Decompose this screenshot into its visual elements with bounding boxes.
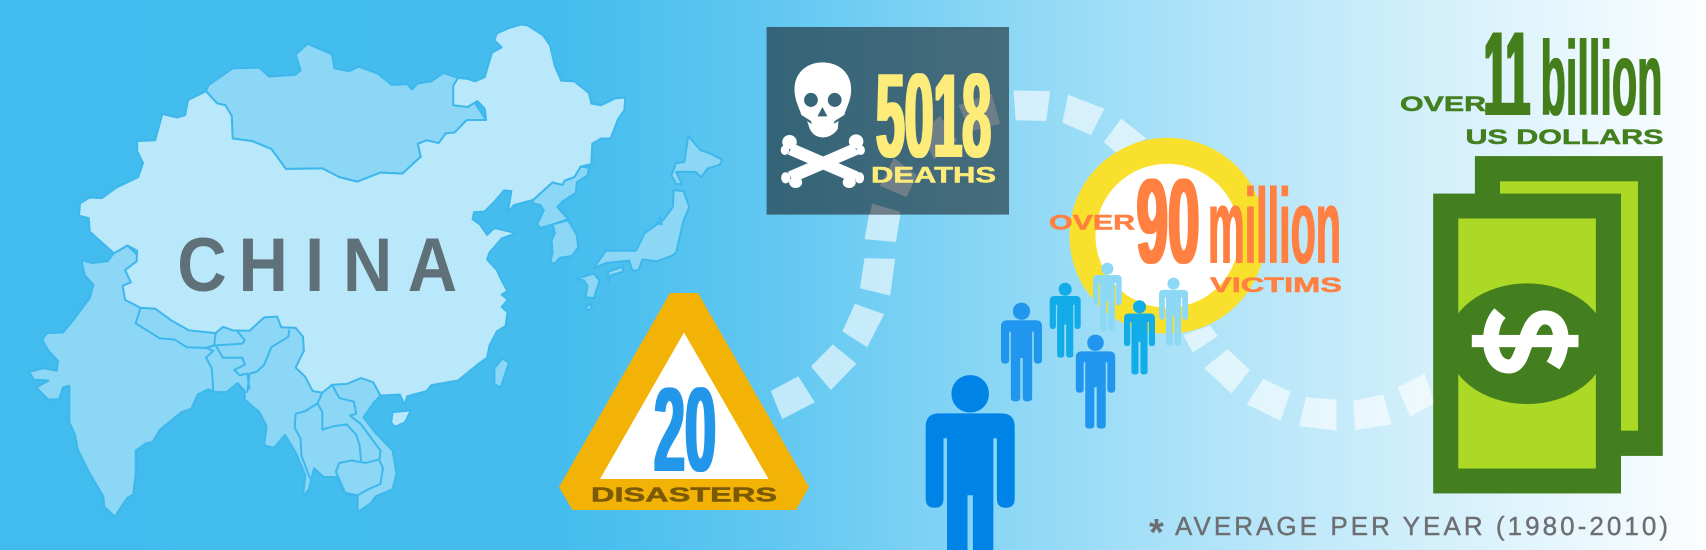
Korea (533, 167, 589, 228)
map of China and neighbours (29, 25, 722, 517)
dollar bar (1472, 335, 1578, 347)
infographic canvas: million (1208, 166, 1341, 286)
note oval (1447, 283, 1607, 404)
blue person (1001, 303, 1042, 401)
label US DOLLARS: US DOLLARS (1466, 126, 1664, 149)
bone knobs (781, 134, 865, 188)
icon: banknotes (1433, 156, 1663, 493)
back note (1475, 156, 1663, 456)
panel: disasters triangle: 20 (654, 363, 716, 497)
panel: disasters triangle (559, 293, 809, 510)
label DISASTERS: DISASTERS (591, 484, 777, 507)
label VICTIMS: VICTIMS (1210, 274, 1342, 297)
panel: victims: 90 (1136, 153, 1200, 289)
footnote text: AVERAGE PER YEAR (1980-2010) (1175, 511, 1668, 541)
map label: CHINA: CHINA (177, 224, 457, 308)
back note inner (1500, 181, 1638, 431)
mid blue person, right (1124, 300, 1155, 375)
light person, right (1159, 278, 1188, 346)
mid blue person (1050, 283, 1081, 358)
yellow ring (1082, 151, 1252, 321)
arc dashes, left half (771, 90, 1104, 419)
dashed arc path (771, 90, 1434, 431)
triangle frame (559, 293, 809, 510)
panel background (767, 27, 1009, 215)
dashes seen through the panel (870, 94, 1000, 215)
South Korea (550, 220, 578, 263)
front note inner (1458, 218, 1596, 469)
panel: economic cost (1400, 7, 1664, 493)
jaw (807, 121, 839, 137)
blue person, centre (1076, 335, 1115, 429)
icon: skull and crossbones (781, 62, 865, 188)
label DEATHS: DEATHS (871, 162, 996, 187)
China (79, 25, 625, 405)
Hainan (391, 410, 411, 427)
dollar sign symbol (1472, 313, 1578, 366)
panel: deaths (767, 27, 1009, 215)
label OVER: OVER (1049, 211, 1136, 235)
front note (1433, 194, 1621, 493)
internal borders of South and Southeast Asia (136, 308, 383, 495)
Japan (577, 136, 722, 310)
light person, back (1093, 263, 1122, 331)
Mongolia (206, 44, 486, 182)
group of people (926, 263, 1188, 550)
footnote (1149, 511, 1668, 550)
crossbones (791, 149, 856, 177)
triangle inner (600, 332, 768, 479)
label OVER: OVER (1400, 93, 1486, 116)
panel: victims (1049, 151, 1342, 321)
Taiwan (494, 358, 509, 388)
panel: economic cost: 11 (1484, 7, 1530, 141)
infographic canvas: 5018 (876, 49, 991, 183)
large person, foreground (926, 375, 1015, 550)
skull (794, 62, 851, 126)
arc dashes, right half (1104, 119, 1434, 431)
India and mainland Southeast Asia (29, 245, 396, 517)
dollar S curve (1491, 313, 1561, 366)
